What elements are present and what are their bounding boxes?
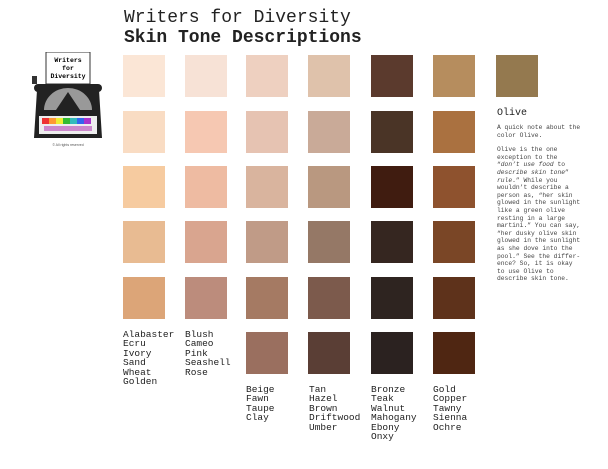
olive note: A quick note about the color Olive. [497,124,580,139]
icon: typewriter logo: for [62,65,74,72]
title: Writers for Diversity [124,8,351,28]
title: Skin Tone Descriptions [124,28,362,48]
label lists: Beige Fawn Taupe Clay [246,384,275,423]
label lists: Gold Copper Tawny Sienna Ochre [433,384,467,433]
icon: typewriter logo: © All rights reserved [52,143,84,147]
label lists: Alabaster Ecru Ivory Sand Wheat Golden [123,329,174,387]
label lists: Blush Cameo Pink Seashell Rose [185,329,231,378]
label lists: Tan Hazel Brown Driftwood Umber [309,384,360,433]
olive note: Olive is the one exception to the “don’t use food to describe skin tone” rule.” While you wouldn’t describe a person as, “her skin glowed in the sunlight like a green olive resting in a large martini.” You can say, “her dusky olive skin glowed in the sunlight as she dove into the pool.” See the differ- ence? So, it is okay to use Olive to describe skin tone. [497,146,580,282]
icon: typewriter logo: Diversity [50,73,86,80]
olive note: Olive [497,108,527,119]
icon: typewriter logo: Writers [54,57,82,64]
label lists: Bronze Teak Walnut Mahogany Ebony Onxy [371,384,417,442]
title [124,8,362,48]
icon: typewriter logo [32,52,102,147]
